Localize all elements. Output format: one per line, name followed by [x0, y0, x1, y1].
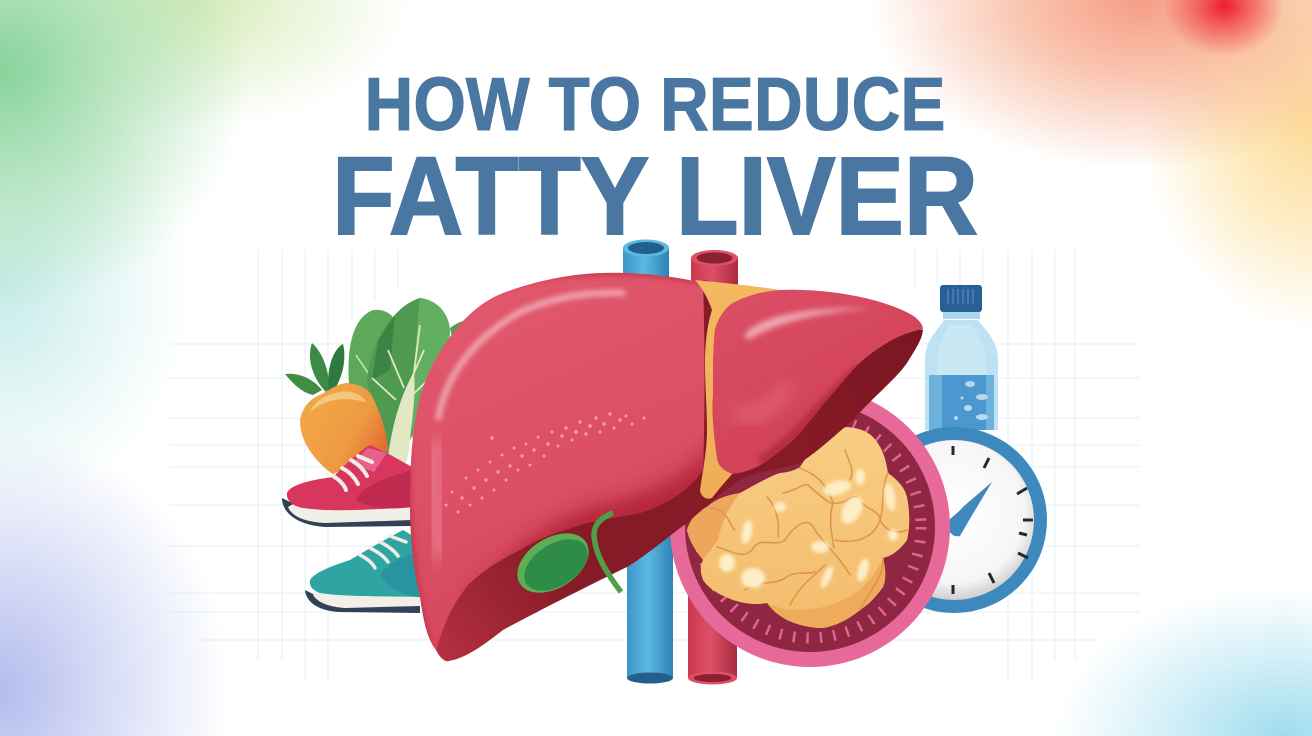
liver — [407, 270, 923, 661]
fat deposit — [687, 427, 909, 628]
icon: leafy greens — [348, 298, 472, 465]
icon: carrot — [285, 343, 388, 474]
liver left lobe — [407, 270, 720, 650]
liver right lobe — [713, 290, 923, 474]
tube: blue lower — [627, 520, 673, 684]
leaf stem and veins — [372, 325, 430, 465]
icon: teal sneaker — [305, 530, 420, 613]
title — [332, 62, 978, 258]
falciform ligament — [695, 280, 780, 499]
title line 1: HOW TO REDUCE — [364, 62, 946, 146]
icon: pink sneaker — [282, 445, 412, 527]
icon: water bottle — [925, 285, 998, 430]
liver underside — [425, 280, 923, 661]
tube: blue upper — [623, 240, 669, 318]
gauge dial with fat — [670, 387, 950, 667]
title line 2: FATTY LIVER — [332, 135, 978, 258]
icon: stopwatch — [861, 427, 1047, 613]
tube: red upper — [691, 250, 738, 308]
gallbladder — [507, 513, 621, 605]
stipple texture — [444, 412, 646, 514]
background grid lines — [170, 250, 1140, 680]
tube: red lower — [688, 520, 737, 684]
